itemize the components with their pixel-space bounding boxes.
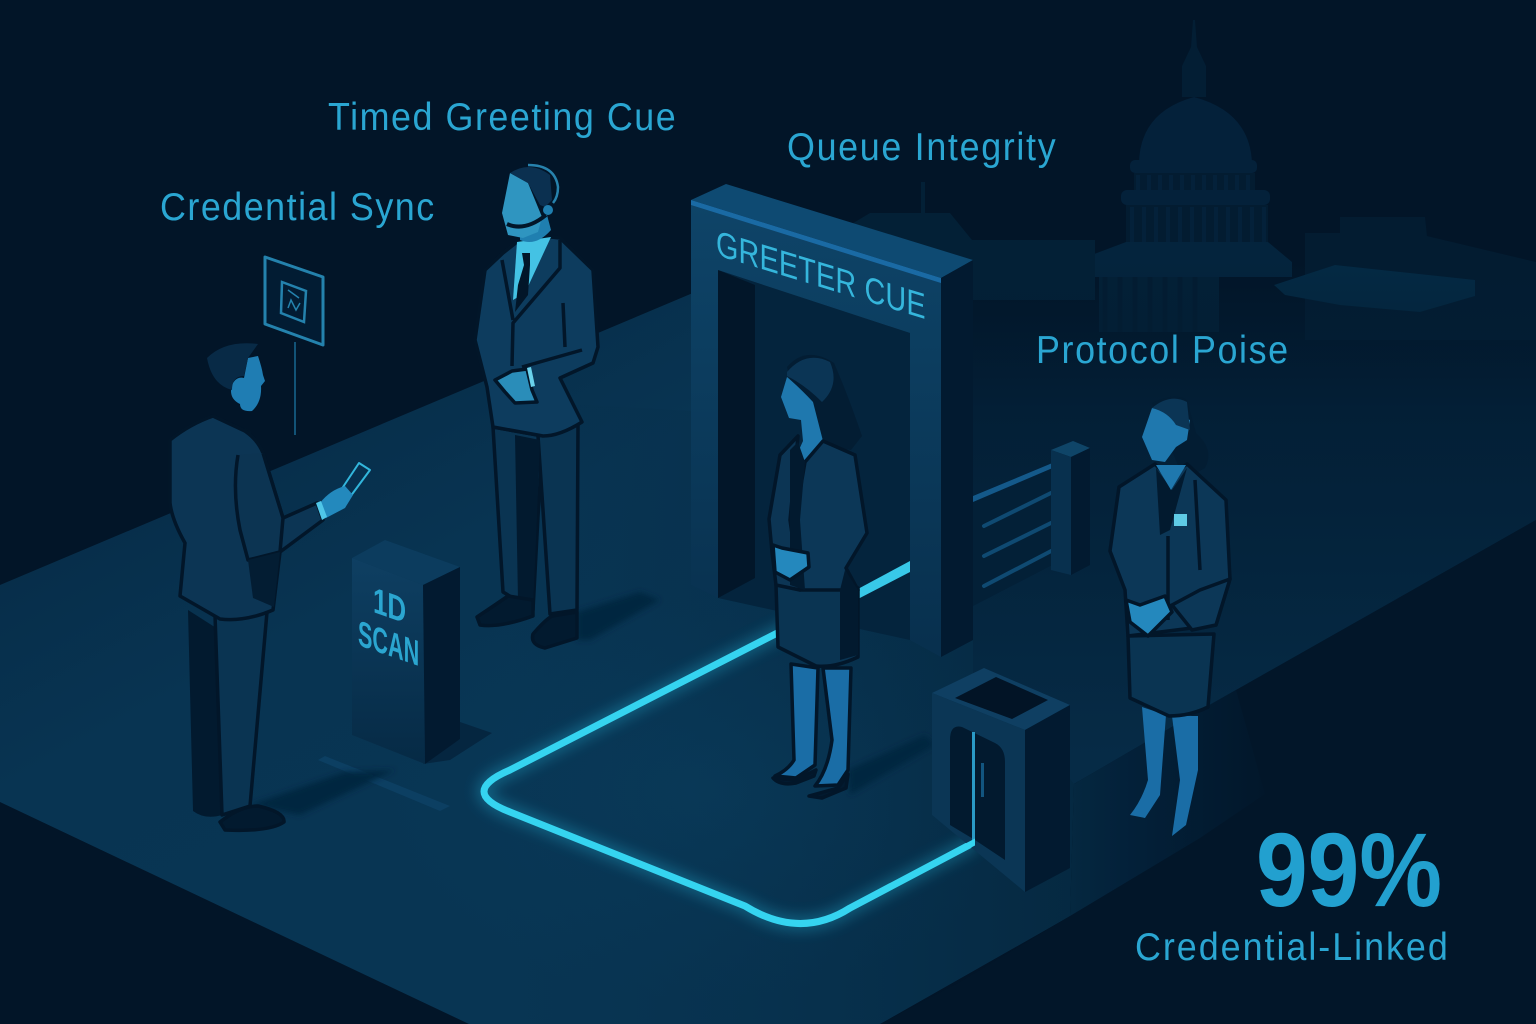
gate sign text: GREETER CUE (716, 224, 926, 328)
stat caption: Credential-Linked (1135, 925, 1448, 968)
scanner post: 1D scan (352, 540, 460, 764)
person: woman in gate (769, 355, 935, 798)
queue path end at kiosk (950, 838, 975, 858)
fence (973, 441, 1090, 606)
floor line near scanner (318, 756, 450, 811)
label: queue integrity: Queue Integrity (787, 125, 1056, 168)
floor shading toward the right (500, 400, 1074, 1024)
scanner label: SCAN (358, 614, 419, 674)
capitol right wing (1274, 265, 1475, 312)
credential sign (265, 257, 323, 435)
floor light halo (370, 580, 1030, 1000)
label: credential sync: Credential Sync (160, 185, 434, 228)
person: man with phone (170, 343, 395, 830)
stat value: 99% (1256, 812, 1442, 929)
person: woman with badge (1110, 397, 1230, 836)
floor platform (0, 290, 1074, 1024)
gate: greeter cue (691, 184, 973, 657)
scanner label: 1D (373, 579, 406, 631)
kiosk (932, 668, 1070, 892)
right dark band (880, 520, 1536, 1024)
person: man with headset (475, 165, 660, 648)
glowing queue path (484, 565, 975, 924)
scanner label (358, 579, 419, 674)
back wall and floor on the right (973, 260, 1536, 784)
label: timed greeting cue: Timed Greeting Cue (328, 95, 676, 138)
queue path segment inside gate (856, 561, 910, 600)
capitol building silhouette (850, 20, 1536, 340)
label: protocol poise: Protocol Poise (1036, 328, 1288, 371)
scanner shadow (423, 722, 492, 764)
kiosk shadow band (1070, 690, 1265, 916)
